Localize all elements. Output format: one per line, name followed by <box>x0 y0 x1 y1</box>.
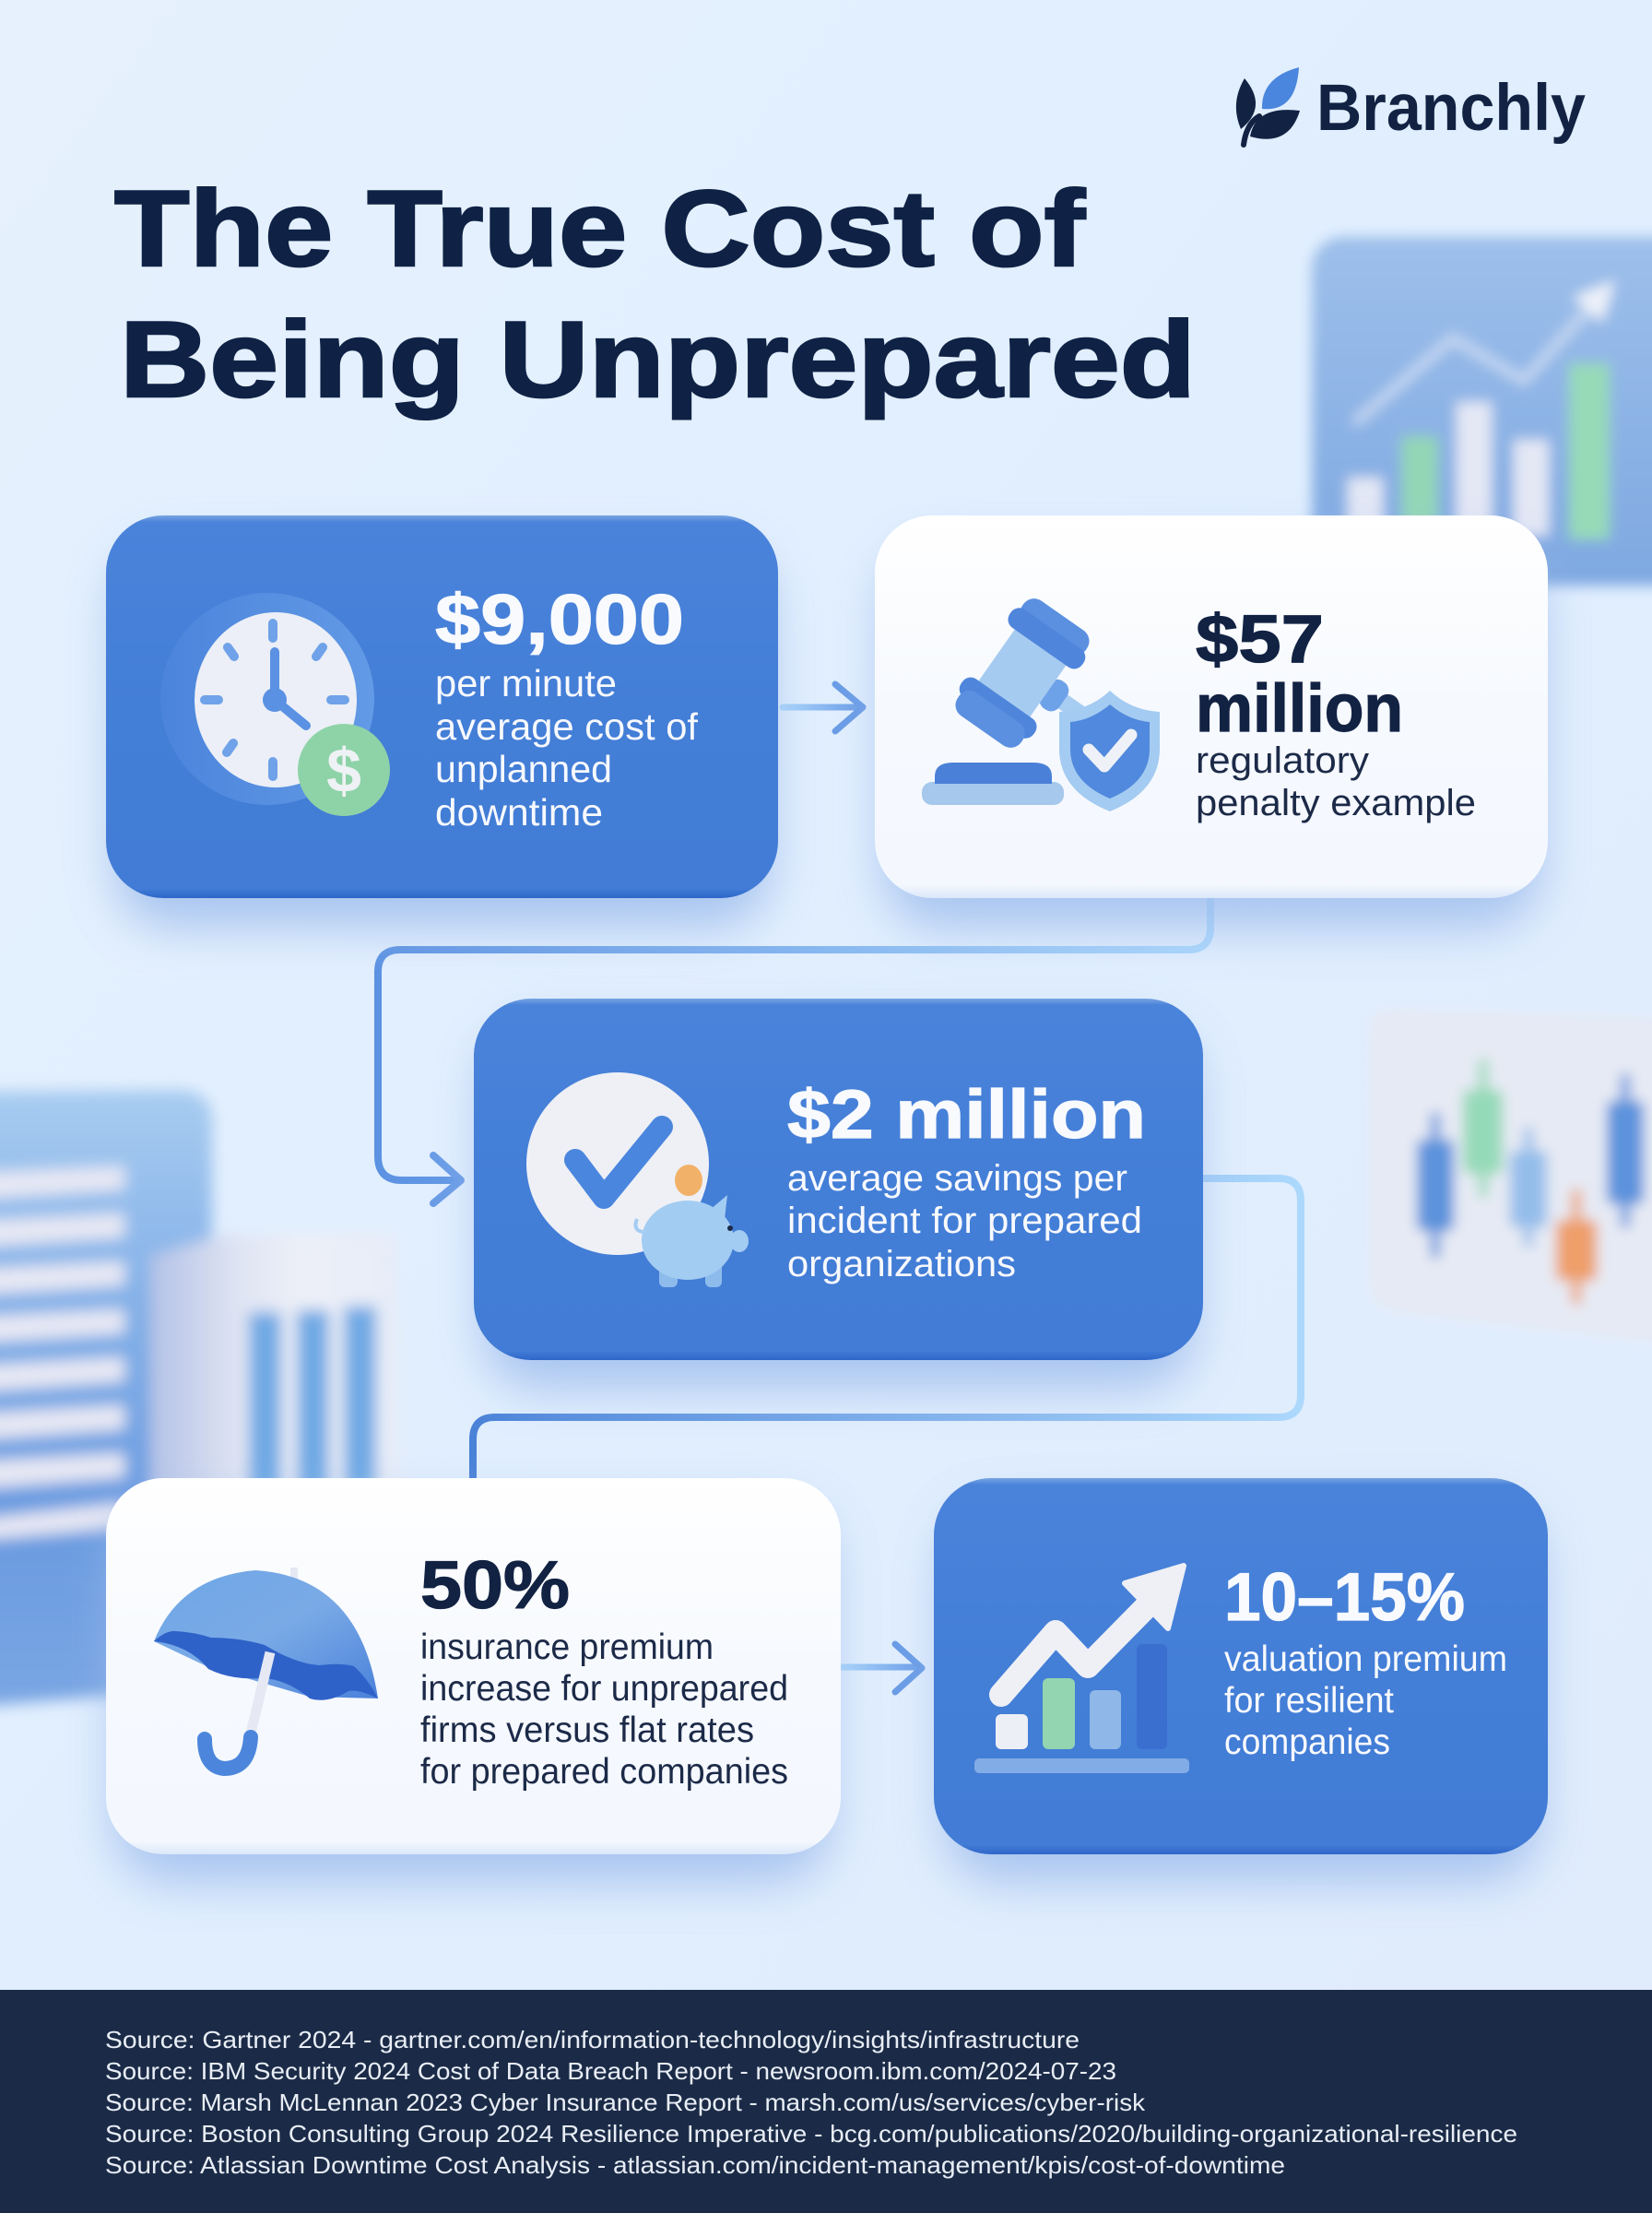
icon: gavel and shield <box>922 590 1160 811</box>
arrow: penalty to savings <box>378 885 1210 1203</box>
stat: 10–15%: 10–15% <box>1224 1560 1465 1635</box>
description: savings: organizations <box>787 1244 1016 1284</box>
description: downtime <box>435 662 699 834</box>
logo: Branchly <box>1236 67 1586 145</box>
description: valuation: for resilient <box>1224 1681 1394 1721</box>
footer: sources: Source: Boston Consulting Group 2024 Resilience Imperative - bcg.com/publications/2020/building-organizational-resilience <box>105 2120 1517 2148</box>
background: blurred chart panel <box>1312 237 1652 586</box>
description: penalty <box>1196 740 1476 823</box>
description: insurance: firms versus flat rates <box>420 1710 754 1750</box>
footer: sources: Source: Marsh McLennan 2023 Cyber Insurance Report - marsh.com/us/services/cyber-risk <box>105 2089 1146 2116</box>
description: downtime: unplanned <box>435 748 612 790</box>
description: savings <box>787 1158 1142 1284</box>
panel: regulatory penalty <box>875 515 1548 898</box>
description: valuation: companies <box>1224 1722 1390 1762</box>
arrow: downtime to penalty <box>783 684 863 731</box>
arrow: savings to insurance <box>473 1178 1301 1485</box>
description: penalty: penalty example <box>1196 783 1476 823</box>
stat: $57 million: million <box>1196 671 1403 746</box>
footer: sources: Source: IBM Security 2024 Cost of Data Breach Report - newsroom.ibm.com/2024-07-23 <box>105 2057 1116 2085</box>
wordmark: Branchly <box>1316 72 1586 145</box>
background: blurred buildings <box>0 1090 402 1706</box>
stat: 50%: 50% <box>420 1548 570 1623</box>
stat: $2 million: $2 million <box>787 1076 1146 1153</box>
description: downtime: downtime <box>435 791 603 834</box>
description: penalty: regulatory <box>1196 740 1369 781</box>
description: insurance <box>420 1627 788 1792</box>
icon: leaf mark <box>1236 67 1300 145</box>
card shadows <box>115 549 1540 1881</box>
panel: insurance <box>106 1478 841 1854</box>
description: savings: incident for prepared <box>787 1201 1142 1241</box>
stat: $57 million <box>1196 602 1403 746</box>
description: downtime: per minute <box>435 662 617 704</box>
description: insurance: for prepared companies <box>420 1752 788 1792</box>
panel: downtime cost <box>106 515 778 898</box>
icon: umbrella <box>154 1568 378 1769</box>
description: downtime: average cost of <box>435 705 699 748</box>
background: blurred candlestick panel <box>1369 1009 1652 1348</box>
description: insurance: insurance premium <box>420 1627 714 1667</box>
icon: check and piggy bank <box>526 1072 749 1287</box>
footer: sources: Source: Gartner 2024 - gartner.com/en/information-technology/insights/infrastructure <box>105 2026 1080 2053</box>
description: savings: average savings per <box>787 1158 1127 1199</box>
footer: sources <box>0 1990 1652 2213</box>
stat: $9,000: $9,000 <box>435 581 684 659</box>
panel: savings <box>474 999 1203 1360</box>
description: valuation <box>1224 1639 1507 1762</box>
icon: growth chart <box>974 1566 1189 1773</box>
panel: valuation <box>934 1478 1548 1854</box>
description: valuation: valuation premium <box>1224 1639 1507 1679</box>
icon: clock with dollar coin: $ <box>326 736 361 806</box>
title: Being Unprepared <box>120 299 1196 420</box>
stat: $57 million: $57 <box>1196 602 1324 677</box>
title: The True Cost of <box>114 168 1086 289</box>
icon: clock with dollar coin <box>160 593 390 816</box>
arrow: insurance to valuation <box>842 1644 922 1692</box>
footer: sources: Source: Atlassian Downtime Cost Analysis - atlassian.com/incident-management/kpis/cost-of-downtime <box>105 2151 1285 2179</box>
title <box>114 168 1196 420</box>
description: insurance: increase for unprepared <box>420 1669 788 1709</box>
